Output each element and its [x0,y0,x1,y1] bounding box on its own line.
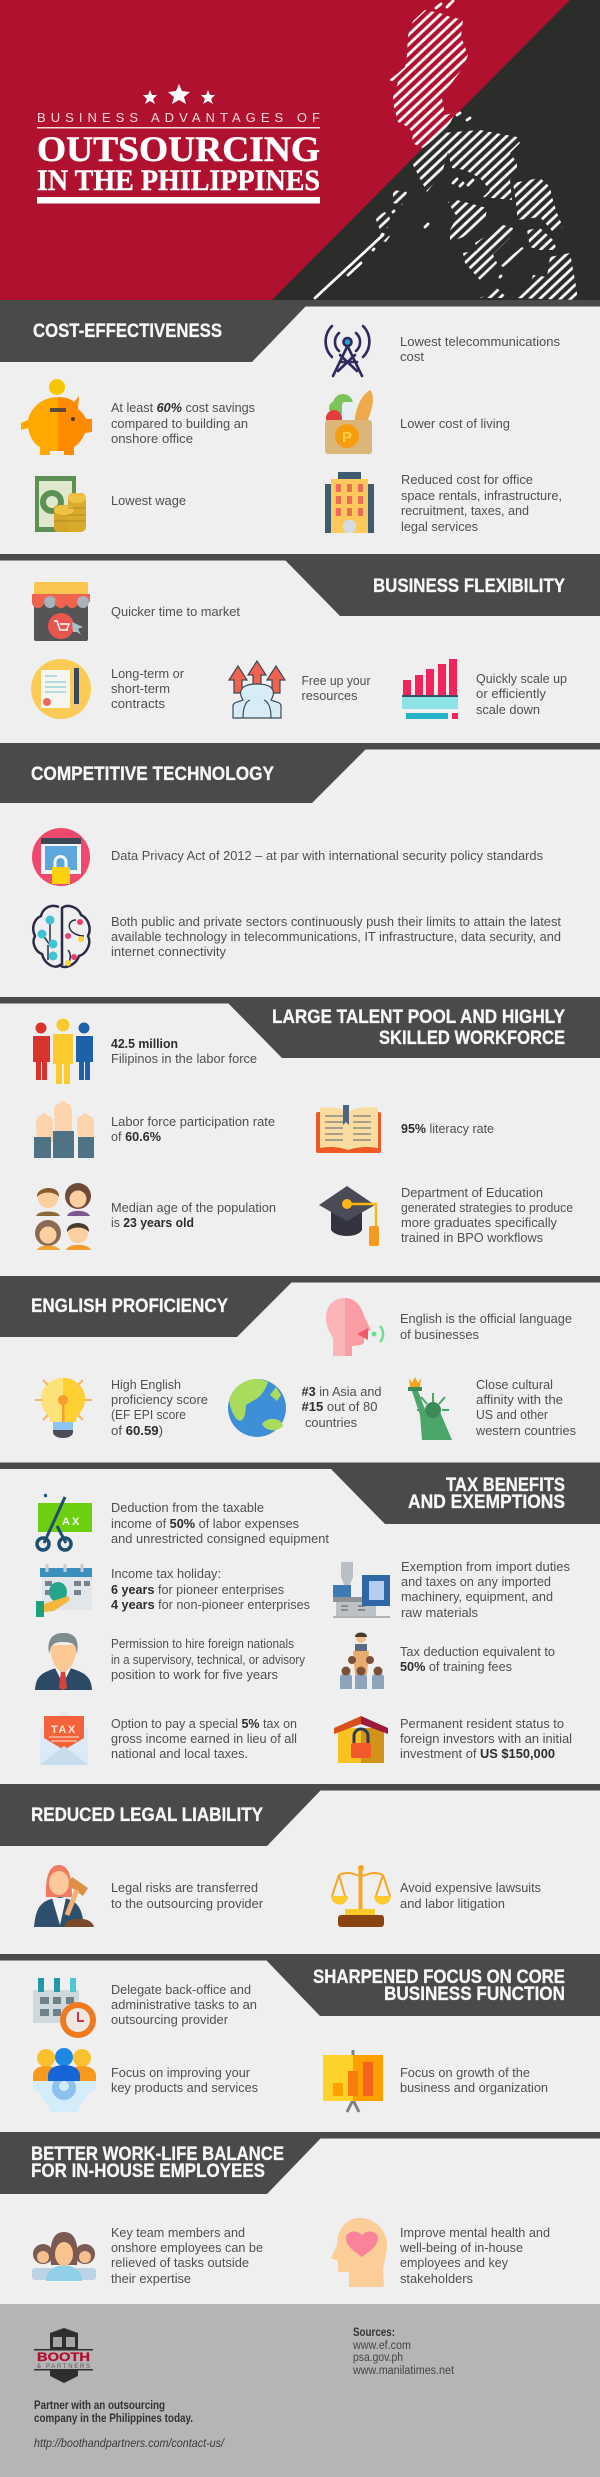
text: cultural affinity: Close cultural [476,1377,553,1392]
heading: work-life balance: FOR IN-HOUSE EMPLOYEES [31,2160,265,2182]
icon: groceries [325,390,373,454]
text: key products: key products and services [111,2080,258,2095]
call to action: Partner with an outsourcing [34,2400,165,2412]
text: office costs: space rentals, infrastructure, [401,488,562,503]
text: rank: #3 in Asia and [302,1384,382,1399]
text: special 5% tax: Option to pay a special 5% tax on [111,1716,297,1731]
heading: sharpened focus: SHARPENED FOCUS ON CORE [313,1966,565,1988]
call to action: http://boothandpartners.com/contact-us/ [34,2438,226,2450]
panel: reduced legal liability [0,1784,600,1927]
heading: competitive technology: COMPETITIVE TECHNOLOGY [31,763,274,785]
text: office costs [401,472,562,534]
panel: large talent pool [0,997,600,1250]
text: training fees: Tax deduction equivalent to [400,1644,555,1659]
heading: english proficiency [0,1276,600,1337]
panel: work-life balance [0,2132,600,2287]
icon: calendar money [36,1564,92,1617]
panel: english proficiency [0,1276,600,1440]
text: english score: proficiency score [111,1392,208,1407]
heading: work-life balance [0,2132,600,2194]
text: import exemption: and taxes on any imported [401,1574,551,1589]
icon: team and gear [33,2048,96,2112]
text: official language: of businesses [400,1327,479,1342]
text: cost savings: onshore office [111,431,193,446]
icon: contract [31,659,91,719]
text: scale: or efficiently [476,686,546,701]
icon: telecom tower [326,326,369,376]
text: office costs: Reduced cost for office [401,472,533,487]
text: growth: business and organization [400,2080,548,2095]
text: import exemption: Exemption from import duties [401,1559,570,1574]
text: contracts: Long-term or [111,666,185,681]
icon: brain [33,906,90,967]
heading: large talent pool: LARGE TALENT POOL AND HIGHLY [272,1006,565,1028]
text: permanent resident: Permanent resident status to [400,1716,564,1731]
sources: psa.gov.ph [353,2352,403,2364]
icon: office building [325,472,374,533]
text: office costs: legal services [401,519,478,534]
heading: large talent pool [0,997,600,1058]
text: official language: English is the official language [400,1311,572,1326]
icon: piggy bank [21,379,92,455]
text: legal risks [111,1880,264,1911]
logo: Booth & Partners: & PARTNERS [37,2364,90,2370]
footer [0,2304,600,2477]
heading: cost-effectiveness [0,300,600,362]
icon: head with heart [331,2218,387,2287]
heading: tax benefits: TAX BENEFITS [446,1474,565,1496]
heading: business flexibility [0,554,600,616]
text: training fees [400,1644,555,1674]
call to action: company in the Philippines today. [34,2413,193,2425]
logo: Booth & Partners [34,2328,93,2383]
heading: tax benefits [0,1462,600,1524]
icon: cash and coins [35,476,86,532]
hero banner [0,0,600,300]
heading: sharpened focus: BUSINESS FUNCTION [384,1983,565,2005]
panel: business flexibility [0,554,600,719]
call to action [34,2400,226,2450]
text: department of education: generated strategies to produce [401,1200,573,1215]
text: department of education: Department of Education [401,1185,543,1200]
text: lowest wage: Lowest wage [111,493,186,508]
text: contracts [111,666,185,711]
text: foreign nationals [111,1636,305,1682]
text: import exemption [401,1559,570,1620]
heading: reduced legal liability [0,1784,600,1846]
text: delegate [111,1982,257,2027]
text: cultural affinity: affinity with the [476,1392,563,1407]
text: scale: scale down [476,702,540,717]
text: deduction: income of 50% of labor expenses [111,1516,299,1531]
text: cost savings: compared to building an [111,416,248,431]
text: foreign nationals: in a supervisory, technical, or advisory [111,1652,305,1667]
text: public and private sectors: Both public and private sectors continuously push their limits to attain the latest [111,914,561,929]
icon: graduation cap [319,1186,379,1246]
text: deduction: and unrestricted consigned equipment [111,1531,329,1546]
text: foreign nationals: position to work for five years [111,1667,278,1682]
text: english score: of 60.59) [111,1423,163,1438]
icon: secure browser [32,828,90,886]
text: public and private sectors: available technology in telecommunications, IT infrastructure, data security, and [111,929,561,944]
text: special 5% tax: national and local taxes. [111,1746,248,1761]
title [37,110,320,204]
text: median age: is 23 years old [111,1215,194,1230]
heading: tax benefits: AND EXEMPTIONS [408,1491,565,1513]
heading: large talent pool: SKILLED WORKFORCE [379,1027,565,1049]
text: income tax holiday: Income tax holiday: [111,1566,221,1581]
text: rank [302,1384,382,1430]
text: public and private sectors: internet connectivity [111,944,226,959]
sources: www.manilatimes.net [352,2365,455,2377]
text: deduction: Deduction from the taxable [111,1500,264,1515]
text: contracts: short-term [111,681,170,696]
icon: light bulb [35,1378,92,1438]
heading: competitive technology [0,743,600,803]
text: training fees: 50% of training fees [400,1659,512,1674]
heading: reduced legal liability: REDUCED LEGAL LIABILITY [31,1804,263,1826]
icon: groceries: P [342,429,352,446]
title: IN THE PHILIPPINES [37,164,320,197]
text: legal risks: Legal risks are transferred [111,1880,258,1895]
text: lawsuits: and labor litigation [400,1896,505,1911]
text: cultural affinity: US and other [476,1407,549,1422]
text: free up [302,673,371,703]
text: median age [111,1200,276,1230]
icon: speaking head [326,1298,383,1356]
text: telecom cost [400,334,560,364]
text: mental health [399,2225,550,2286]
text: rank: #15 out of 80 [302,1399,378,1414]
icon: scales of justice [331,1865,391,1927]
text: permanent resident: foreign investors with an initial [400,1731,572,1746]
text: official language [400,1311,572,1342]
text: time to market: Quicker time to market [111,604,240,619]
text: lawsuits: Avoid expensive lawsuits [400,1880,541,1895]
text: cost savings: At least 60% cost savings [111,400,255,415]
text: income tax holiday [111,1566,310,1612]
sources [352,2327,455,2377]
text: foreign nationals: Permission to hire foreign nationals [111,1636,294,1651]
text: cultural affinity: western countries [475,1423,576,1438]
text: telecom cost: Lowest telecommunications [400,334,560,349]
text: public and private sectors [111,914,561,959]
icon: online store [32,582,90,641]
text: cost savings [111,400,255,446]
icon: tax envelope [40,1712,88,1765]
text: deduction [111,1500,329,1546]
icon: raised hands [34,1101,94,1158]
icon: training podium [340,1632,384,1689]
icon: globe [228,1379,286,1437]
title: OUTSOURCING [37,129,320,169]
text: key team members [111,2225,263,2286]
text: key team members: their expertise [111,2271,191,2286]
panel: competitive technology [0,743,600,967]
icon: four faces [35,1183,91,1250]
text: special 5% tax: gross income earned in lieu of all [111,1731,297,1746]
text: scale: Quickly scale up [476,671,567,686]
text: rank: countries [305,1415,357,1430]
text: key team members: Key team members and [111,2225,245,2240]
text: income tax holiday: 4 years for non-pioneer enterprises [111,1597,310,1612]
text: 42.5 million: Filipinos in the labor force [111,1051,257,1066]
text: lawsuits [400,1880,541,1911]
stars [143,84,215,104]
icon: tax scissors [37,1494,92,1550]
text: department of education [401,1185,573,1245]
icon: locked house [334,1716,388,1763]
text: department of education: more graduates specifically [401,1215,557,1230]
icon: people with arrows [229,661,285,718]
text: mental health: Improve mental health and [400,2225,550,2240]
text: mental health: stakeholders [400,2271,473,2286]
map of the Philippines [315,1,578,300]
text: 42.5 million [111,1036,257,1066]
heading: business flexibility: BUSINESS FLEXIBILITY [373,575,565,597]
panel: cost-effectiveness [0,300,600,534]
text: free up: Free up your [302,673,371,688]
title: BUSINESS ADVANTAGES OF [37,110,320,125]
text: office costs: recruitment, taxes, and [401,503,529,518]
text: department of education: trained in BPO workflows [401,1230,543,1245]
text: participation: Labor force participation rate [111,1114,275,1129]
icon: businessman [35,1633,92,1690]
text: growth [400,2065,548,2095]
sources: Sources: [353,2327,395,2339]
heading: cost-effectiveness: COST-EFFECTIVENESS [33,320,222,342]
text: key products [111,2065,258,2095]
text: median age: Median age of the population [111,1200,276,1215]
text: growth: Focus on growth of the [400,2065,530,2080]
text: mental health: employees and key [400,2255,508,2270]
text: special 5% tax [111,1716,297,1761]
text: participation: of 60.6% [111,1129,161,1144]
text: income tax holiday: 6 years for pioneer enterprises [111,1582,284,1597]
icon: lawyer with gavel [34,1865,94,1927]
text: english score [111,1377,208,1438]
heading: work-life balance: BETTER WORK-LIFE BALANCE [31,2143,284,2165]
text: import exemption: raw materials [401,1605,478,1620]
text: telecom cost: cost [400,349,424,364]
panel: sharpened focus [0,1954,600,2112]
icon: team of women [32,2232,96,2281]
logo: Booth & Partners: BOOTH [37,2352,90,2364]
text: delegate: administrative tasks to an [111,1997,257,2012]
text: free up: resources [302,688,358,703]
text: legal risks: to the outsourcing provider [111,1896,264,1911]
text: key team members: onshore employees can be [111,2240,263,2255]
text: mental health: well-being of in-house [399,2240,523,2255]
text: delegate: outsourcing provider [111,2012,229,2027]
icon: scale chart [402,659,458,719]
heading: sharpened focus [0,1954,600,2016]
icon: calendar and clock [33,1978,96,2038]
text: permanent resident: investment of US $150,000 [400,1746,555,1761]
icon: presentation chart [323,2050,383,2112]
text: permanent resident [400,1716,572,1761]
icon: tax envelope: TAX [51,1724,77,1736]
heading: english proficiency: ENGLISH PROFICIENCY [31,1295,228,1317]
text: 42.5 million: 42.5 million [111,1036,178,1051]
text: cultural affinity [475,1377,576,1438]
icon: machine [333,1562,390,1618]
text: scale [476,671,567,717]
text: cost of living: Lower cost of living [400,416,510,431]
text: english score: (EF EPI score [111,1407,186,1422]
icon: open book [316,1105,381,1153]
text: literacy: 95% literacy rate [401,1121,494,1136]
text: contracts: contracts [111,696,166,711]
text: data privacy: Data Privacy Act of 2012 – at par with international security policy standards [111,848,543,863]
text: delegate: Delegate back-office and [111,1982,251,1997]
text: import exemption: machinery, equipment, and [401,1589,553,1604]
text: english score: High English [111,1377,181,1392]
icon: three people [33,1018,93,1084]
text: participation [111,1114,275,1144]
panel: tax benefits [0,1462,600,1765]
text: key team members: relieved of tasks outside [111,2255,249,2270]
icon: tax scissors: AX [62,1516,81,1528]
icon: statue of liberty [408,1377,452,1440]
sources: www.ef.com [352,2340,411,2352]
text: key products: Focus on improving your [111,2065,251,2080]
